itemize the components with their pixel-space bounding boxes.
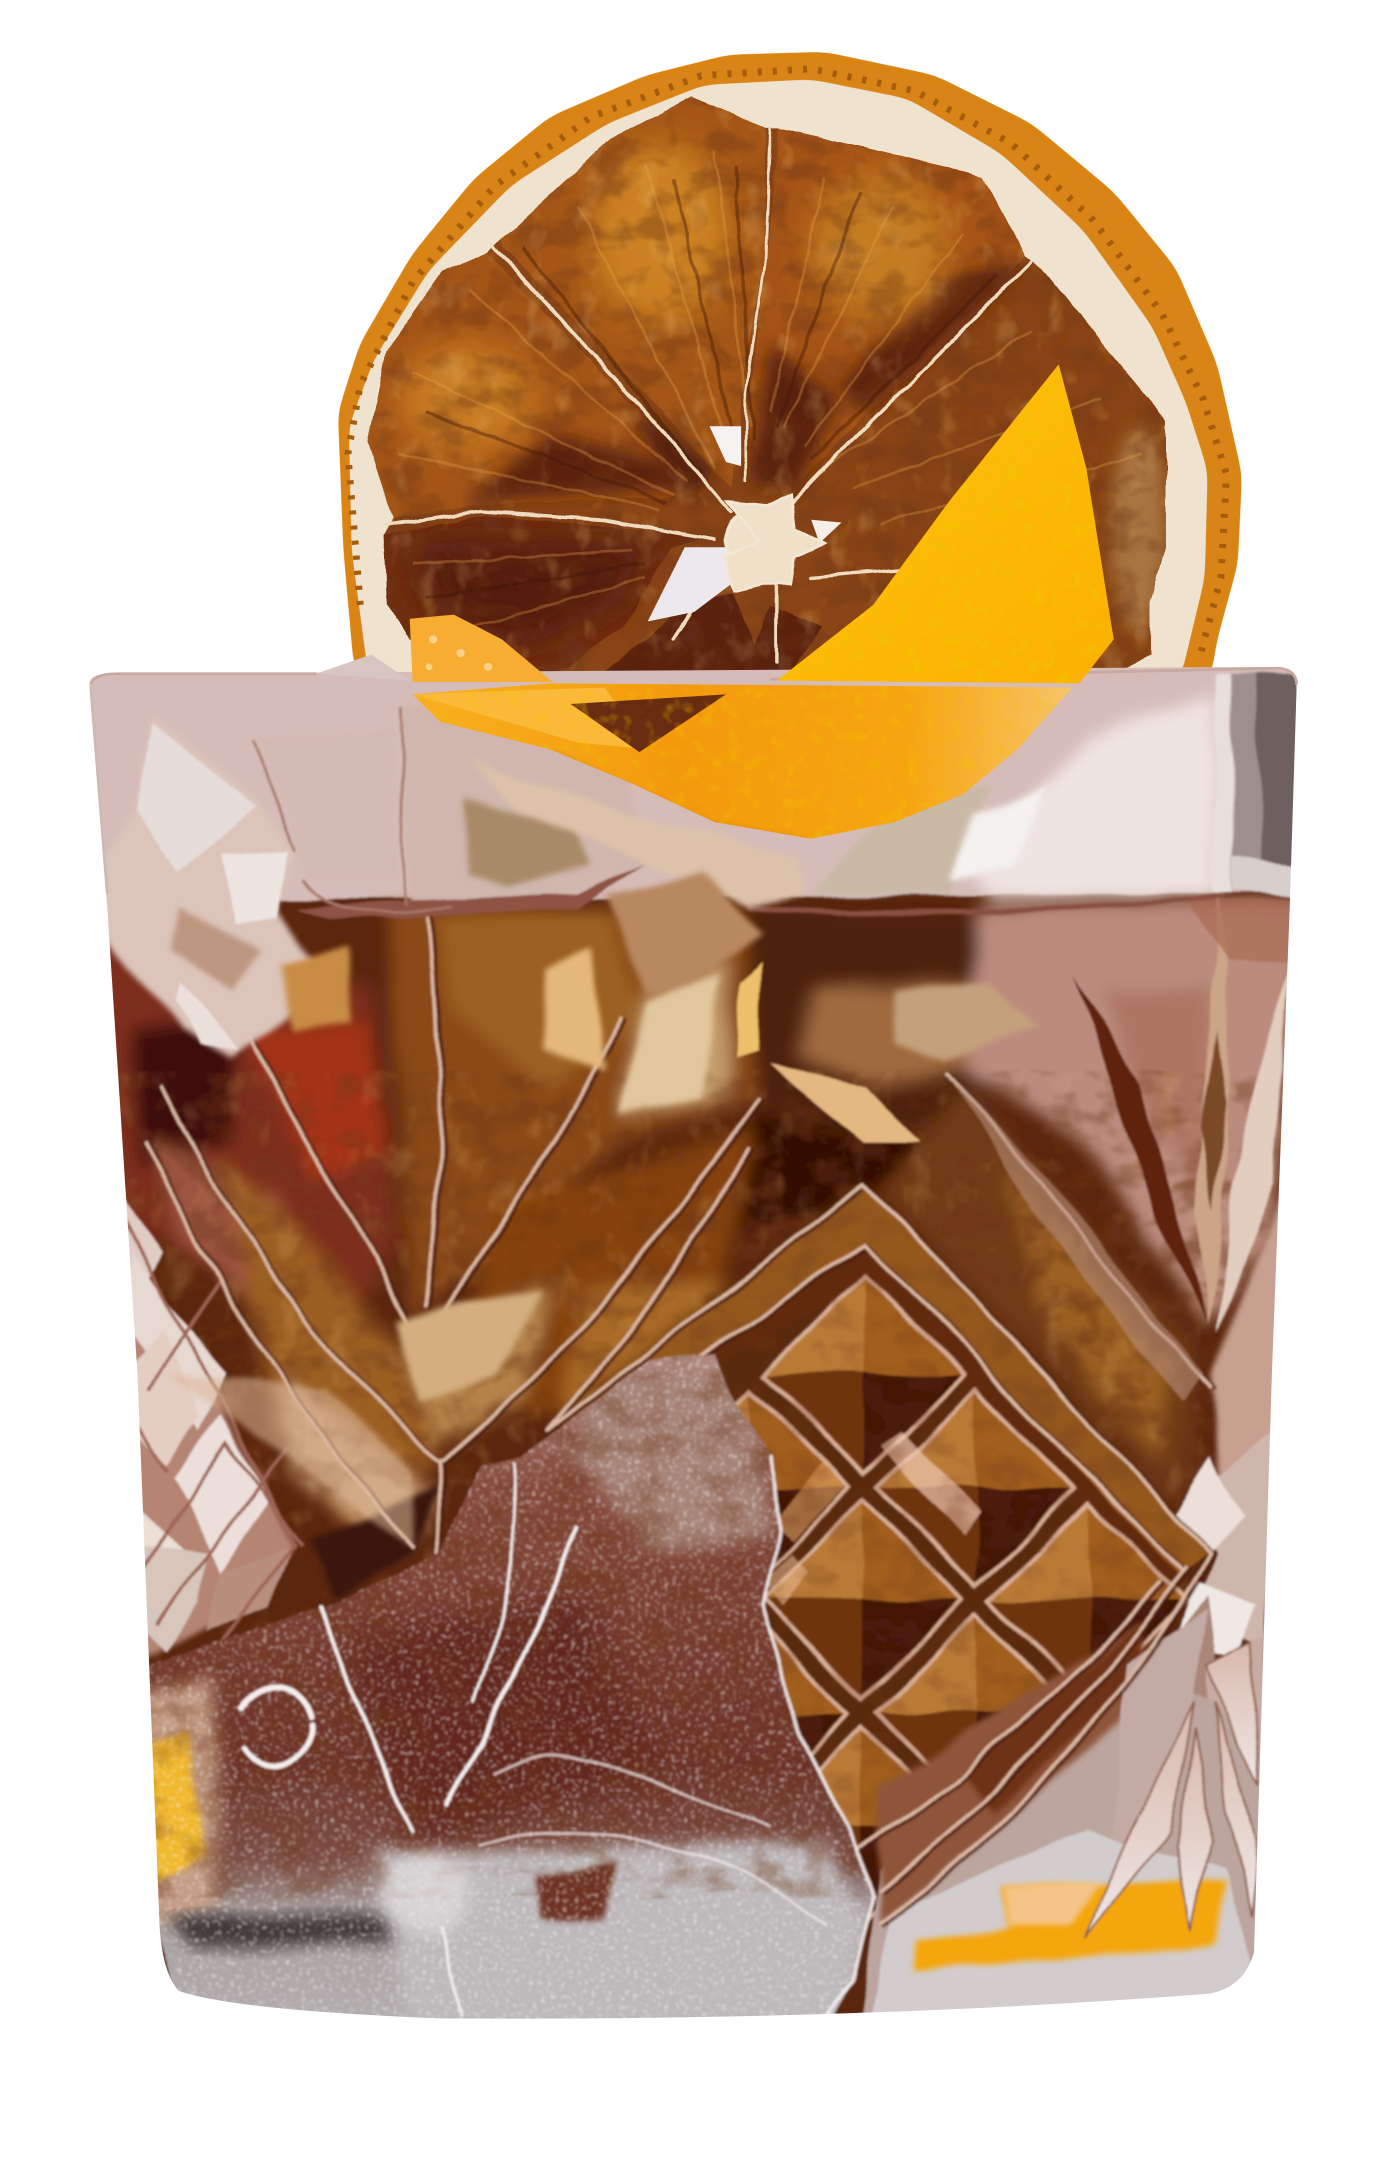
bottom right fan blades bbox=[1086, 1643, 1258, 1939]
segment: left lower bbox=[384, 516, 709, 679]
pith ring bbox=[349, 80, 1207, 681]
bottom right clear base bbox=[859, 1609, 1272, 2021]
liquid base bbox=[83, 894, 1320, 2049]
orange peel lower seen through glass bbox=[413, 681, 1072, 846]
right wall dark band bbox=[1233, 674, 1320, 901]
mid ice highlights bbox=[165, 949, 1038, 1547]
right crystal facets bbox=[1174, 1193, 1278, 1772]
small orange peel bbox=[410, 615, 553, 682]
left diamond crystal bbox=[96, 1182, 440, 1664]
flesh with segments bbox=[358, 82, 1182, 687]
large ice chunk bbox=[138, 1347, 880, 2035]
rind pores bbox=[348, 69, 1226, 660]
central ice cube amber bbox=[385, 907, 756, 1320]
rocks glass bbox=[55, 646, 1334, 2049]
centre holes bbox=[648, 547, 734, 621]
rind bbox=[338, 52, 1242, 681]
left red area bbox=[110, 946, 414, 1308]
liquid mottling bbox=[118, 1069, 1284, 1662]
segment: left upper bbox=[369, 252, 697, 518]
cut glass lines bbox=[144, 916, 1210, 1925]
membranes bbox=[385, 129, 1031, 660]
top right mauve bbox=[969, 901, 1306, 1327]
upper glass wall bbox=[90, 667, 1292, 904]
yellow reflection bbox=[912, 1882, 1225, 1970]
diamond-cut grid bbox=[550, 1182, 1237, 1925]
large orange peel upper bbox=[770, 357, 1127, 687]
centre pith bbox=[722, 495, 825, 591]
upper ice cubes bbox=[89, 701, 804, 1059]
flesh fibres bbox=[399, 151, 1141, 632]
ice fractures bbox=[237, 1457, 873, 2014]
glass rim bbox=[91, 654, 1297, 894]
segment: bottom bbox=[591, 594, 822, 682]
segment: top left bbox=[502, 96, 766, 489]
upper glass white reflections bbox=[749, 674, 1320, 962]
flesh shading bbox=[358, 82, 1182, 687]
left lower amber bbox=[220, 1155, 440, 1540]
segment: top right bbox=[747, 128, 1024, 500]
blade cuts top right bbox=[949, 880, 1290, 1402]
dried orange slice bbox=[338, 52, 1242, 687]
liquid colour patches bbox=[83, 901, 1306, 1554]
segment: right bbox=[797, 268, 1166, 681]
